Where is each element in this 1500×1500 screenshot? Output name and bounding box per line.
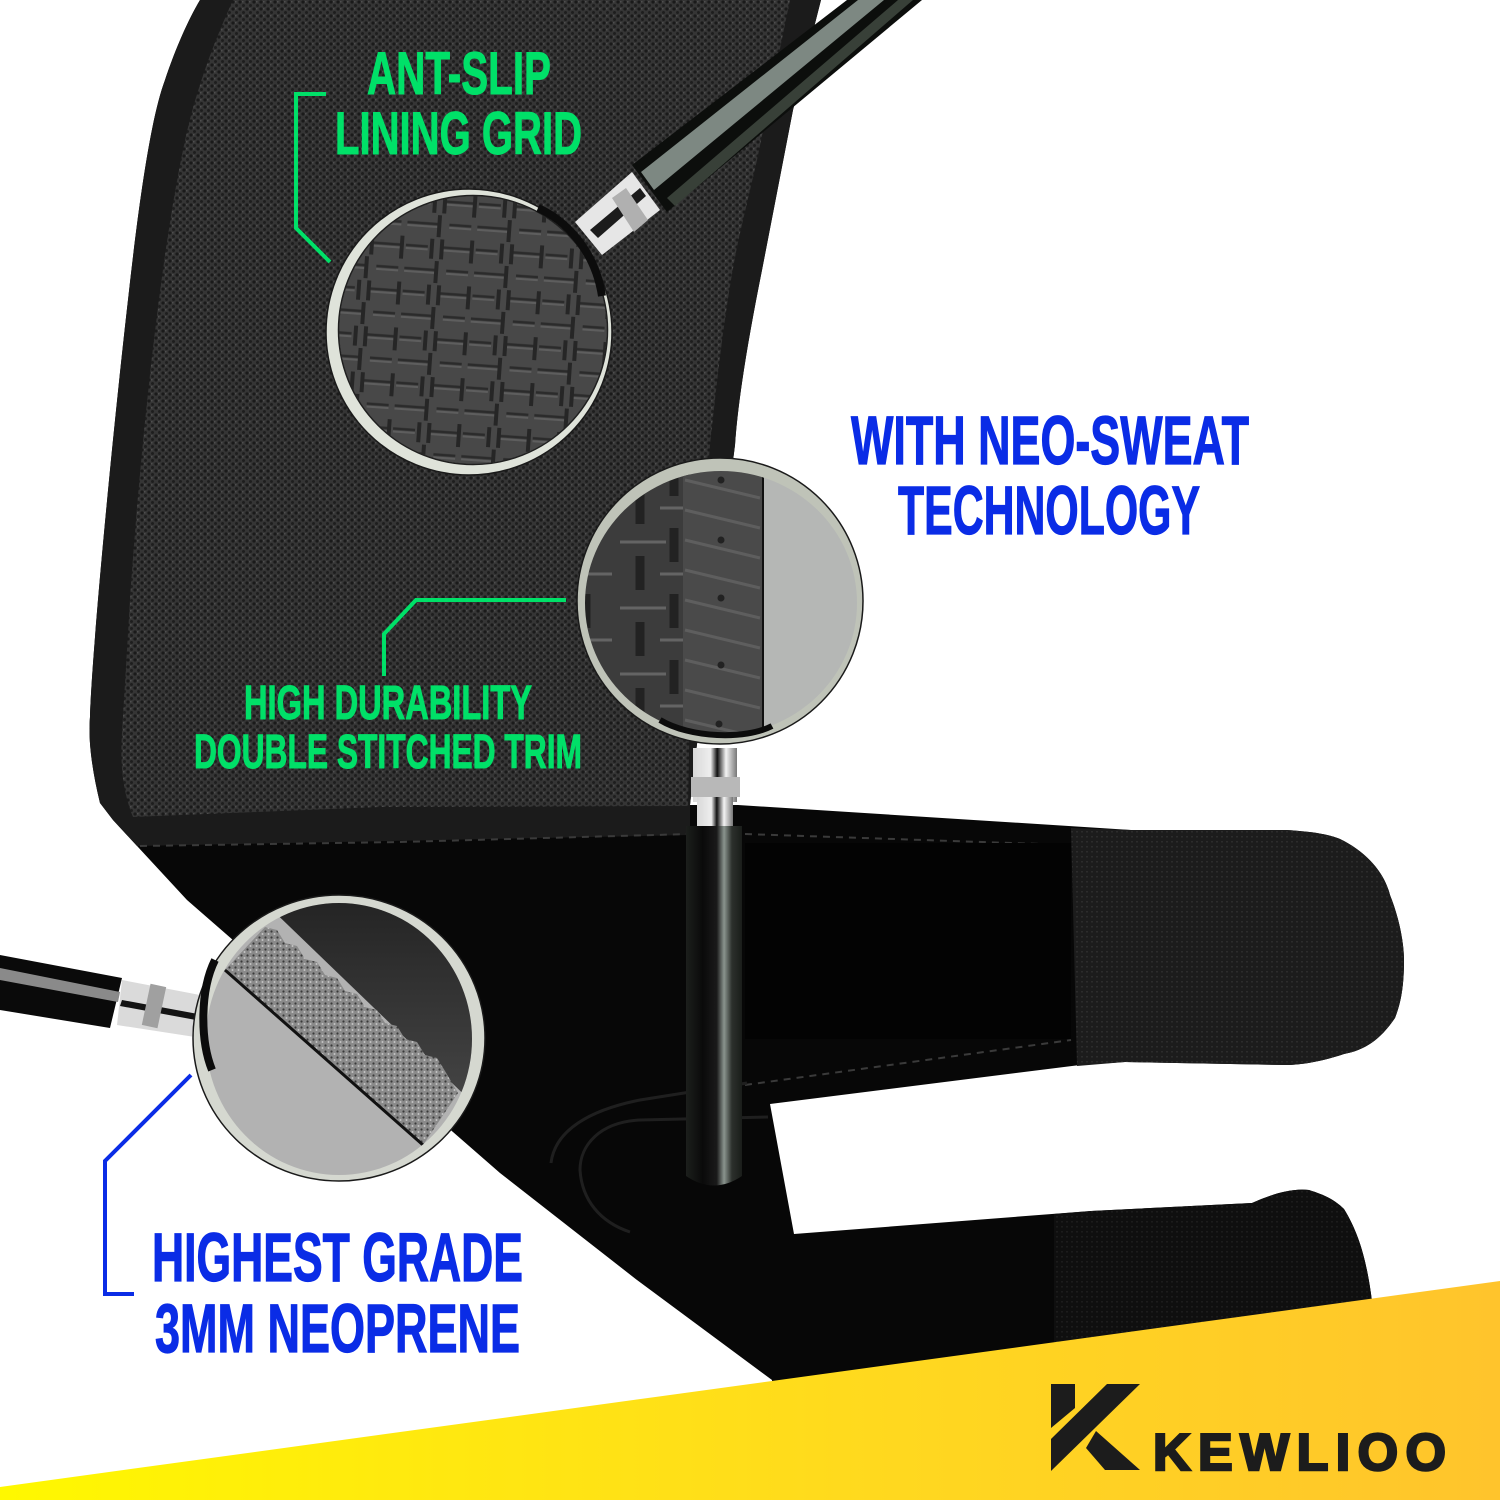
strap inner dark block [745,843,1071,1039]
heading: highest grade 3mm neoprene: HIGHEST GRADE [152,1219,523,1296]
lower strap fold [551,1083,768,1232]
yellow footer band [0,1281,1500,1500]
heading: with neo-sweat technology [851,402,1249,549]
heading: with neo-sweat technology: TECHNOLOGY [898,472,1200,549]
handle [0,955,200,1037]
magnifier 2: double stitched trim [577,458,868,1186]
lower strap closure patch [1054,1190,1372,1400]
heading: high durability double stitched trim [194,677,582,779]
heading: high durability double stitched trim: HIGH DURABILITY [244,677,532,730]
magnifier 3: neoprene cross-section [0,895,485,1181]
callout line: neoprene [105,1075,191,1294]
stitching line [140,834,1071,1085]
rim clip [203,960,215,1070]
lens [339,196,607,464]
logo wordmark: KEWLIOO [1153,1424,1446,1482]
magnifier 1: anti-slip lining [326,0,922,480]
rim [326,189,612,475]
callout line: anti-slip [296,94,330,262]
heading: highest grade 3mm neoprene [152,1219,523,1367]
logo: Kewlioo [1051,1384,1446,1482]
logo mark: K [1051,1384,1140,1471]
handle [686,748,742,1186]
heading: highest grade 3mm neoprene: 3MM NEOPRENE [155,1290,520,1367]
heading: with neo-sweat technology: WITH NEO-SWEAT [851,402,1249,479]
callout line: stitched trim [384,600,566,676]
rim clip [538,208,602,296]
rim [577,458,863,744]
lens [585,471,857,732]
upper strap closure patch [1071,828,1404,1066]
lens [200,900,480,1180]
textured upper panel [121,0,790,817]
heading: anti-slip lining grid: LINING GRID [335,100,582,167]
rim [193,895,485,1181]
heading: high durability double stitched trim: DOUBLE STITCHED TRIM [194,726,582,779]
upper edge binding [89,0,821,846]
handle [575,0,922,255]
heading: anti-slip lining grid: ANT-SLIP [367,40,551,107]
heading: anti-slip lining grid [335,40,582,167]
